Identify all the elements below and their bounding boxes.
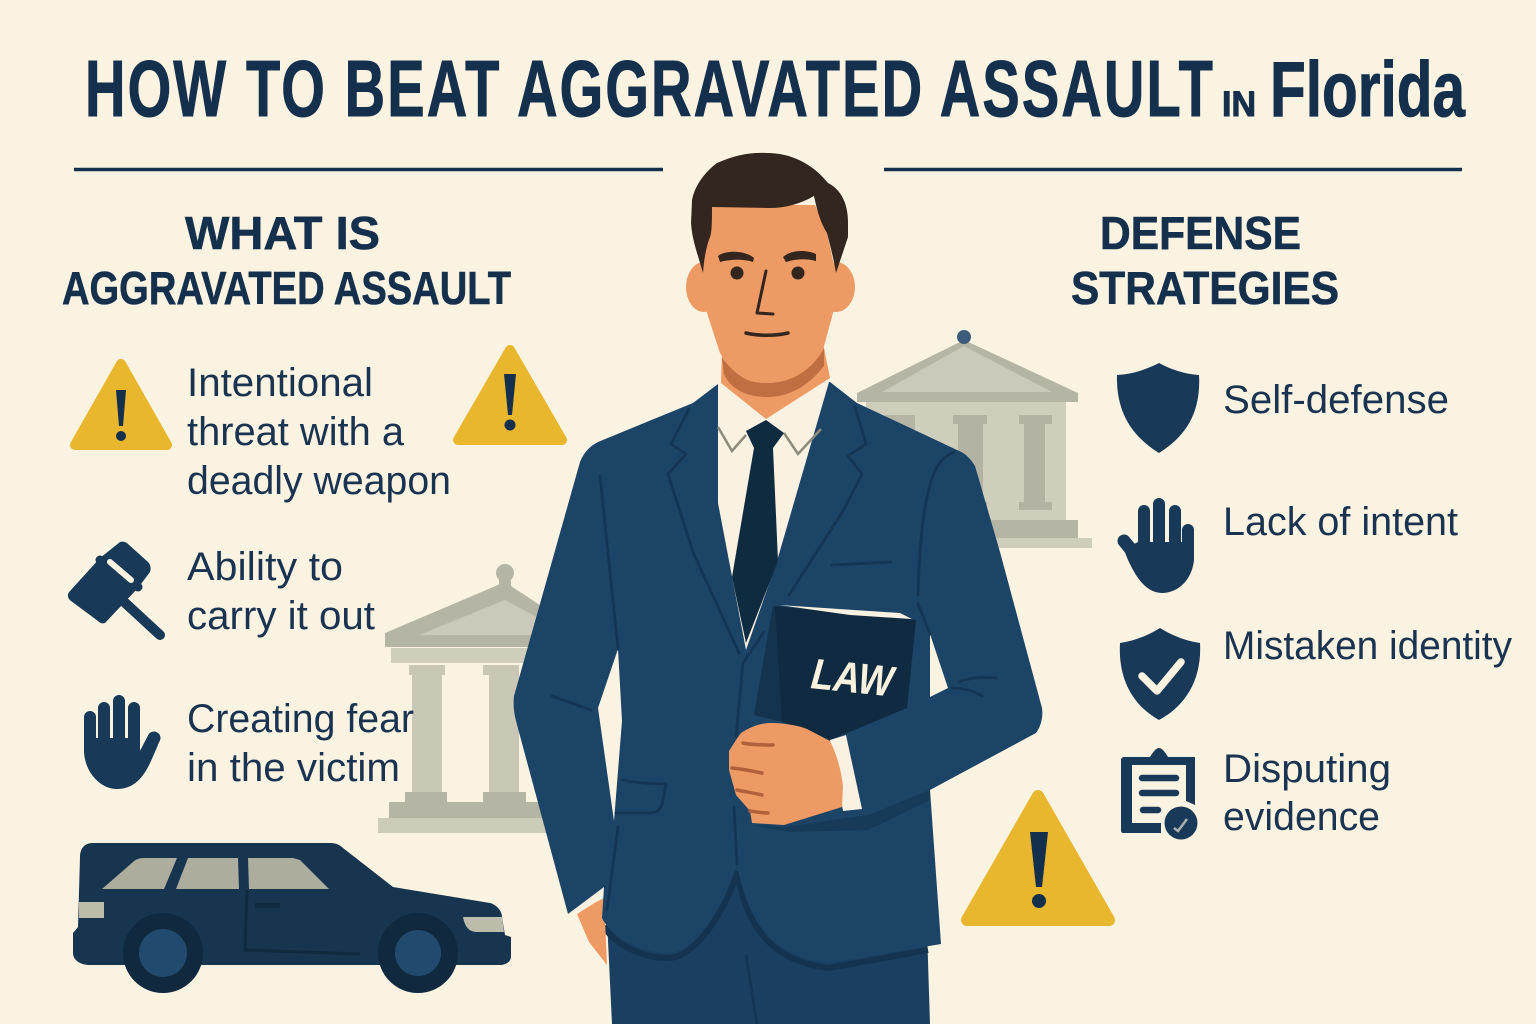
icon: warning triangle small — [458, 350, 562, 440]
icon: warning triangle — [75, 364, 167, 445]
icon: gavel — [68, 542, 160, 635]
hair — [691, 153, 848, 273]
left hand in pocket — [570, 887, 607, 965]
text: disputing evidence: Disputing — [1223, 747, 1391, 791]
forearm shadow — [752, 790, 930, 832]
text: disputing evidence — [1223, 747, 1391, 839]
heading: defense strategies: STRATEGIES — [1071, 262, 1339, 314]
panel: what is aggravated assault — [62, 207, 562, 993]
icon: clipboard — [1121, 748, 1198, 840]
text: intentional threat: Intentional — [187, 361, 373, 405]
panel: defense strategies — [967, 207, 1512, 920]
background courthouse left — [378, 564, 570, 833]
icon: car — [73, 843, 511, 993]
jacket seams — [552, 407, 996, 910]
collar lines — [718, 427, 821, 454]
text: intentional threat — [187, 361, 451, 503]
text: disputing evidence: evidence — [1223, 795, 1380, 839]
text: ability: Ability to — [187, 545, 343, 589]
heading: what is: AGGRAVATED ASSAULT — [62, 262, 511, 314]
text: ability: carry it out — [187, 594, 375, 638]
jacket — [514, 382, 1042, 963]
icon: raised hand right — [1122, 504, 1194, 593]
text: lack of intent: Lack of intent — [1223, 500, 1458, 544]
text: self-defense: Self-defense — [1223, 378, 1449, 422]
title: IN — [1222, 85, 1256, 124]
tie — [732, 420, 784, 643]
law book — [754, 605, 916, 740]
holding hand — [729, 723, 862, 825]
shirt — [718, 382, 829, 650]
text: creating fear: in the victim — [187, 746, 400, 790]
face — [703, 205, 835, 383]
text: intentional threat: deadly weapon — [187, 459, 451, 503]
heading: what is: WHAT IS — [185, 207, 380, 259]
ears — [686, 262, 855, 312]
icon: shield with check — [1120, 628, 1200, 720]
text: mistaken identity: Mistaken identity — [1223, 624, 1512, 668]
icon: raised hand left — [84, 701, 158, 789]
facial features — [718, 251, 816, 335]
neck — [721, 348, 830, 419]
text: ability — [187, 545, 375, 638]
trousers — [604, 850, 930, 1024]
heading: what is — [62, 207, 511, 314]
title: Florida — [1270, 45, 1465, 133]
heading: defense strategies — [1071, 207, 1339, 314]
text: creating fear: Creating fear — [187, 697, 414, 741]
law book: LAW — [809, 650, 898, 707]
text: creating fear — [187, 697, 414, 790]
text: intentional threat: threat with a — [187, 410, 405, 454]
background courthouse right — [857, 330, 1092, 548]
icon: warning triangle large — [967, 796, 1109, 920]
heading: defense strategies: DEFENSE — [1100, 207, 1301, 259]
icon: shield — [1117, 363, 1199, 453]
central figure: lawyer — [514, 153, 1042, 1024]
